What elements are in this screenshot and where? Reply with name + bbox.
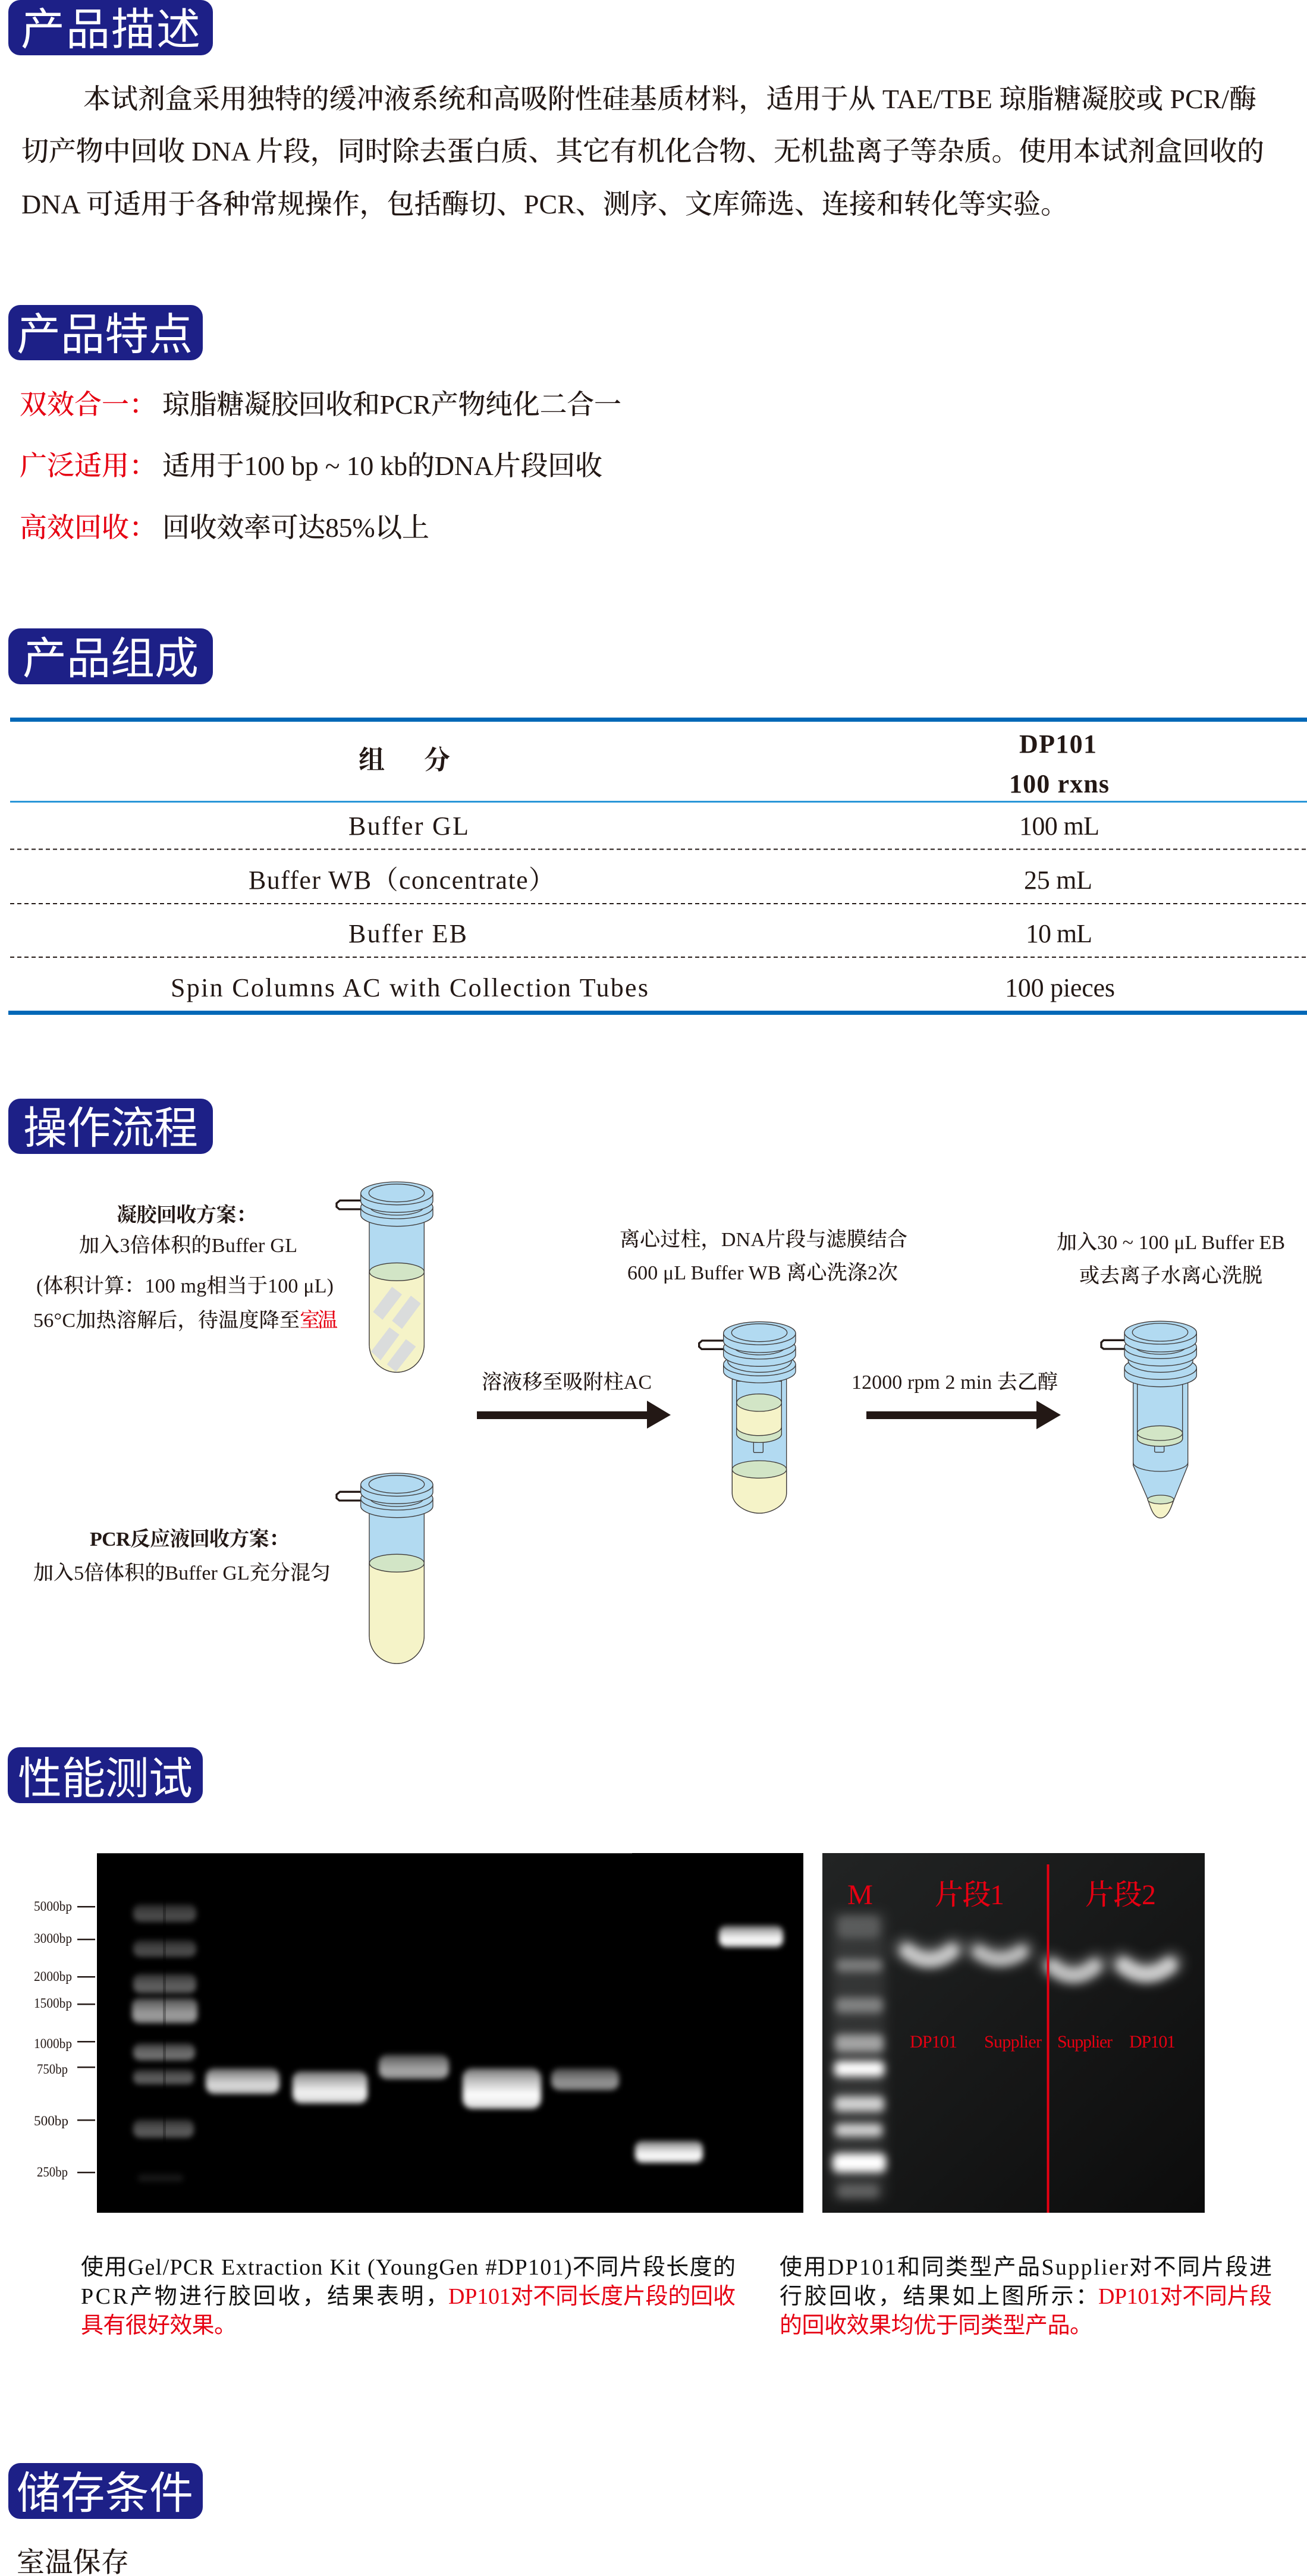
label: spin to remove ethanol: 12000 rpm 2 min 去乙醇 <box>852 1371 1058 1394</box>
chart: gel 1 size labels: 3000bp <box>34 1931 72 1946</box>
arrow: transfer to column <box>477 1401 671 1429</box>
text block: elution <box>1057 1231 1285 1287</box>
text block: product features: 高效回收： <box>20 512 156 543</box>
heading: 储存条件: 储存条件 <box>17 2458 193 2521</box>
chart: gel 1 size labels: 1500bp <box>34 1996 72 2011</box>
caption: right gel: 的回收效果均优于同类型产品。 <box>780 2313 1092 2338</box>
text block: elution: 或去离子水离心洗脱 <box>1079 1265 1262 1287</box>
icon: column in microcentrifuge tube <box>1101 1321 1196 1518</box>
chart: gel 1 electrophoresis image <box>97 1853 803 2213</box>
text block: product features: 琼脂糖凝胶回收和PCR产物纯化二合一 <box>162 389 621 420</box>
chart: gel 1 size labels: 750bp <box>37 2062 68 2077</box>
table: kit components: 100 pieces <box>1005 973 1115 1002</box>
table: kit components: 组 分 <box>359 746 450 775</box>
text block: product features: 双效合一： <box>20 389 156 420</box>
chart: gel 2 electrophoresis comparison: M <box>847 1879 873 1911</box>
chart: gel 2 electrophoresis comparison <box>822 1853 1205 2213</box>
text block: gel recovery protocol <box>33 1203 338 1332</box>
text block: product description: DNA 可适用于各种常规操作，包括酶切、PCR、测序、文库筛选、连接和转化等实验。 <box>21 189 1068 220</box>
chart: gel 1 size labels: 500bp <box>34 2113 68 2128</box>
text block: product description: 切产物中回收 DNA 片段，同时除去蛋白质、其它有机化合物、无机盐离子等杂质。使用本试剂盒回收的 <box>21 136 1264 167</box>
icon: tube with gel pieces <box>337 1182 433 1372</box>
text block: product features: 广泛适用： <box>20 451 156 481</box>
text block: gel recovery protocol: 室温 <box>300 1309 338 1332</box>
chart: gel 1 size labels: 1000bp <box>34 2036 72 2051</box>
text block: gel recovery protocol: 56°C加热溶解后，待温度降至 <box>33 1309 300 1332</box>
text block: gel recovery protocol: 加入3倍体积的Buffer GL <box>79 1234 297 1257</box>
chart: gel 2 electrophoresis comparison: DP101 <box>910 2032 957 2052</box>
table: kit components: Buffer EB <box>348 919 467 948</box>
chart: gel 1 size labels <box>34 1899 95 2179</box>
caption: right gel: DP101对不同片段 <box>1098 2284 1272 2309</box>
text block: PCR recovery protocol: 加入5倍体积的Buffer GL充分混匀 <box>33 1562 331 1584</box>
caption: left gel: 具有很好效果。 <box>81 2313 237 2338</box>
icon: tube with PCR mix <box>337 1473 433 1663</box>
table: kit components: Buffer GL <box>348 812 469 841</box>
heading: 性能测试: 性能测试 <box>18 1743 193 1807</box>
text block: product features: 适用于100 bp ~ 10 kb的DNA片段回收 <box>162 451 602 481</box>
table: kit components: Buffer WB（concentrate） <box>249 866 555 895</box>
chart: gel 2 electrophoresis comparison: Supplier <box>1057 2032 1113 2052</box>
label: transfer to column: 溶液移至吸附柱AC <box>482 1371 652 1394</box>
chart: gel 1 size labels: 2000bp <box>34 1969 72 1984</box>
caption: right gel: 行胶回收，结果如上图所示： <box>780 2284 1098 2309</box>
icon: spin column in collection tube <box>699 1322 796 1513</box>
lobes: ladder lane split <box>163 1899 166 2143</box>
table: kit components: 100 rxns <box>1009 769 1109 798</box>
chart: gel 2 electrophoresis comparison: 片段2 <box>1085 1879 1156 1911</box>
table: kit components: 25 mL <box>1024 866 1092 895</box>
heading: 产品特点: 产品特点 <box>17 299 193 363</box>
text block: gel recovery protocol: (体积计算：100 mg相当于100 μL) <box>36 1275 334 1297</box>
table: kit components: 10 mL <box>1026 919 1092 948</box>
text block: product description <box>21 84 1264 220</box>
chart: gel 1 size labels: 250bp <box>37 2165 68 2179</box>
text block: elution: 加入30 ~ 100 μL Buffer EB <box>1057 1231 1285 1254</box>
caption: left gel: 使用Gel/PCR Extraction Kit (YoungGen #DP101)不同片段长度的 <box>81 2255 736 2280</box>
text block: product features: 回收效率可达85%以上 <box>162 512 429 543</box>
table: kit components: 100 mL <box>1019 812 1099 841</box>
chart: gel 2 electrophoresis comparison: DP101 <box>1129 2032 1176 2052</box>
text block: bind and wash: 离心过柱，DNA片段与滤膜结合 <box>620 1228 907 1251</box>
text block: PCR recovery protocol <box>33 1527 331 1584</box>
text block: product description: 本试剂盒采用独特的缓冲液系统和高吸附性硅基质材料，适用于从 TAE/TBE 琼脂糖凝胶或 PCR/酶 <box>83 84 1256 115</box>
heading: 产品组成: 产品组成 <box>23 623 199 687</box>
chart: gel 2 electrophoresis comparison: Supplier <box>984 2032 1042 2052</box>
table: kit components: Spin Columns AC with Collection Tubes <box>171 973 648 1002</box>
text block: bind and wash <box>620 1228 907 1284</box>
chart: gel 2 electrophoresis comparison: 片段1 <box>935 1879 1004 1911</box>
caption: right gel <box>780 2255 1272 2338</box>
table: kit components <box>8 718 1307 1015</box>
heading: 操作流程: 操作流程 <box>23 1093 198 1156</box>
chart: gel 1 size labels: 5000bp <box>34 1899 72 1914</box>
table: kit components: DP101 <box>1019 729 1097 759</box>
caption: left gel: PCR产物进行胶回收，结果表明， <box>81 2284 448 2309</box>
caption: right gel: 使用DP101和同类型产品Supplier对不同片段进 <box>780 2255 1272 2280</box>
arrow: spin <box>866 1401 1061 1429</box>
caption: left gel: DP101对不同长度片段的回收 <box>448 2284 736 2309</box>
text block: product features <box>20 389 621 543</box>
text block: bind and wash: 600 μL Buffer WB 离心洗涤2次 <box>627 1262 898 1284</box>
text block: PCR recovery protocol: PCR反应液回收方案： <box>90 1527 289 1550</box>
caption: left gel <box>81 2255 736 2338</box>
text block: gel recovery protocol: 凝胶回收方案： <box>117 1203 256 1226</box>
